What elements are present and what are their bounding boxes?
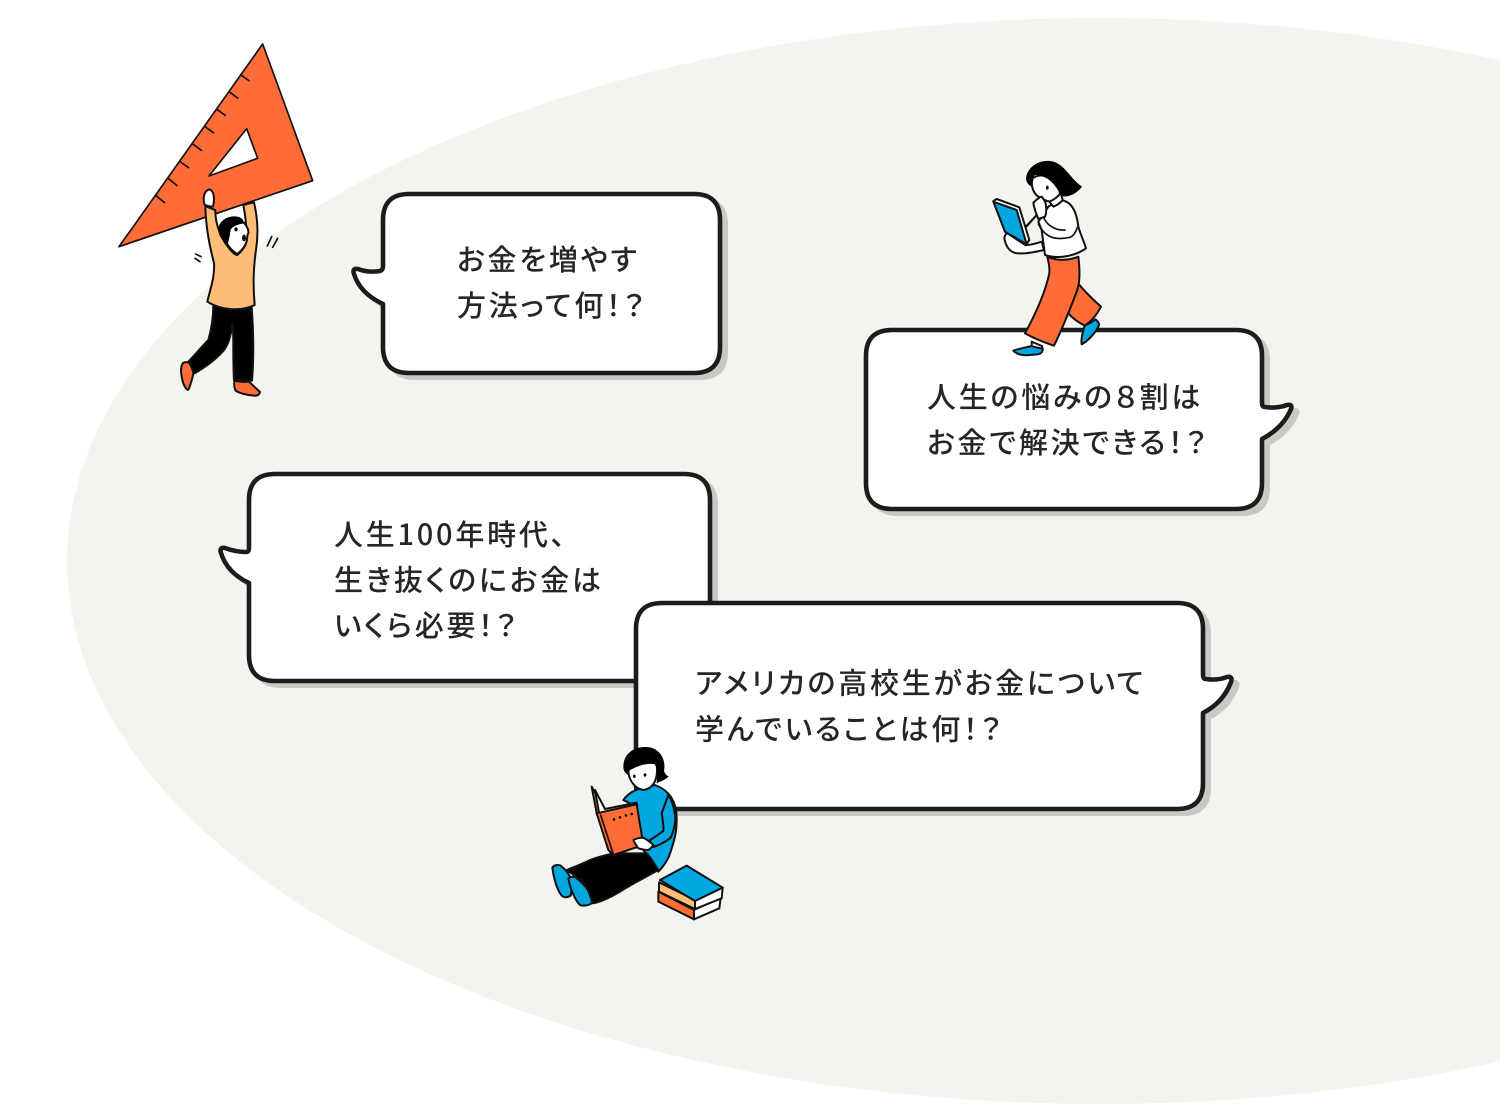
figure: left arm holding book	[1004, 213, 1044, 253]
speech bubble: お金を増やす方法: お金を増やす	[457, 237, 640, 279]
illustration: person sitting and reading	[552, 747, 723, 919]
speech bubble: 人生100年時代	[220, 474, 716, 686]
figure: white sweater	[1038, 200, 1086, 257]
icon: orange set square	[119, 44, 313, 247]
figure: hair	[1026, 161, 1082, 196]
figure: arm and hand	[649, 795, 675, 847]
speech bubble: 人生100年時代: いくら必要！？	[334, 603, 519, 645]
figure: trousers	[188, 305, 253, 381]
figure: back shoe	[1081, 319, 1099, 344]
speech bubble: 人生の悩みの8割: お金で解決できる！？	[927, 420, 1209, 462]
figure: face	[1032, 176, 1060, 202]
figure: blue shoes	[552, 865, 571, 897]
figure: hand	[204, 189, 214, 207]
figure: hair	[623, 747, 669, 783]
figure: blue sweater	[623, 785, 677, 872]
figure: face	[628, 763, 657, 790]
figure: sweater	[205, 202, 257, 309]
figure: motion marks	[195, 237, 278, 262]
figure: shoes	[181, 362, 260, 396]
icon: open orange book	[592, 787, 643, 855]
illustration: person lifting set square	[119, 44, 313, 396]
icon: stack of books	[658, 866, 723, 919]
figure: front shoe	[1032, 342, 1043, 350]
speech bubble: 人生100年時代: 生き抜くのにお金は	[334, 558, 604, 600]
illustration: woman reading while walking	[993, 161, 1101, 355]
figure: black trousers	[567, 853, 658, 903]
speech bubble: お金を増やす方法: 方法って何！？	[457, 283, 647, 325]
speech bubble: 人生の悩みの8割: 人生の悩みの８割は	[927, 374, 1203, 416]
icon: blue book	[993, 199, 1029, 245]
figure: face and hair	[218, 216, 248, 254]
speech bubble: 人生100年時代: 人生100年時代、	[334, 512, 568, 554]
speech bubble: お金を増やす方法	[354, 194, 726, 378]
speech bubble: アメリカの高校生: アメリカの高校生がお金について	[695, 660, 1146, 702]
speech bubble: 人生の悩みの8割	[866, 330, 1298, 514]
speech bubble: アメリカの高校生: 学んでいることは何！？	[695, 706, 1004, 748]
speech bubble: アメリカの高校生	[636, 603, 1238, 814]
figure: front trouser leg	[1025, 257, 1079, 346]
figure: raised hand and sleeve	[1033, 197, 1046, 219]
figure: back trouser leg	[1068, 282, 1101, 326]
